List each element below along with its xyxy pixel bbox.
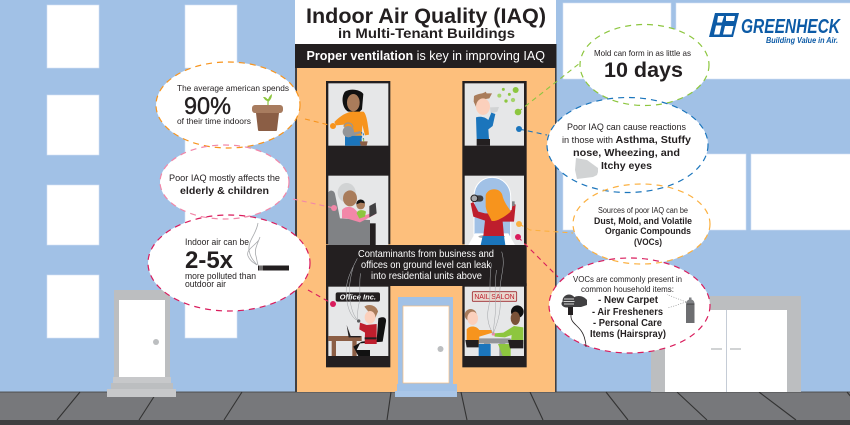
callout: mold in 10 days: [580, 24, 709, 106]
sign: Office Inc.: Office Inc.: [340, 294, 376, 301]
illustration: nail salon customers: [465, 305, 524, 356]
illustration: grandmother and child reading: [328, 183, 377, 245]
icon: cigarette with smoke: [248, 223, 289, 270]
callout: 2-5x more polluted: 2-5x: [185, 247, 234, 274]
illustration: woman with hair dryer: [468, 177, 516, 245]
icon: tissue: [575, 158, 598, 179]
icon: spray can: [667, 294, 694, 323]
upper windows: [326, 81, 527, 246]
callout: VOC household items: - New Carpet: [598, 295, 659, 306]
sidewalk: [0, 392, 850, 425]
text: contaminants note: [358, 249, 494, 282]
left building windows: [47, 5, 237, 338]
callout: 2-5x more polluted: Indoor air can be: [185, 237, 249, 247]
callout: sources: [573, 184, 710, 264]
sign: nail salon: NAIL SALON: [474, 292, 515, 301]
icon: hair dryer: [561, 294, 587, 347]
title: in Multi-Tenant Buildings: [338, 25, 515, 41]
illustration: man sneezing near mold: [474, 87, 519, 146]
callout: 2-5x more polluted: more polluted than: [185, 271, 256, 281]
sign: Office Inc.: [336, 292, 380, 302]
callout: elderly and children: [160, 145, 289, 219]
central door: [395, 297, 457, 397]
right building windows: [563, 3, 850, 230]
callout: reactions: Poor IAQ can cause reactions: [567, 122, 686, 132]
right building door: [651, 296, 801, 392]
text: contaminants note: offices on ground level can leak: [361, 260, 492, 271]
lower band and ground floor windows: [326, 245, 527, 367]
callout: 90% indoors: The average american spends: [177, 83, 289, 93]
callout: VOC household items: - Air Fresheners: [592, 307, 663, 318]
left building door: [107, 290, 176, 397]
callout: elderly and children: elderly & children: [180, 185, 269, 197]
callout: elderly and children: Poor IAQ mostly affects the: [169, 173, 280, 183]
callout: reactions: in those with Asthma, Stuffy: [562, 134, 691, 146]
central orange building: [295, 0, 557, 392]
text: contaminants note: into residential units above: [371, 271, 482, 282]
callout: reactions: [547, 98, 708, 192]
ventilation banner: Proper ventilation is key in improving IAQ: [306, 48, 545, 63]
callout: sources: Organic Compounds: [605, 226, 691, 237]
title: Indoor Air Quality (IAQ): [306, 5, 546, 28]
text: contaminants note: Contaminants from business and: [358, 249, 494, 260]
logo: Greenheck: [709, 13, 841, 45]
title: [306, 5, 546, 41]
ventilation banner: [295, 44, 556, 68]
callout: 2-5x more polluted: outdoor air: [185, 279, 226, 289]
illustration: office worker: [328, 305, 386, 356]
callout: VOC household items: Items (Hairspray): [590, 329, 666, 340]
connector lines and dots: [293, 63, 580, 304]
callout: reactions: nose, Wheezing, and: [573, 147, 680, 159]
logo: Greenheck: Building Value in Air.: [766, 36, 838, 45]
icon: potted plant: [252, 94, 283, 131]
callout: mold in 10 days: Mold can form in as little as: [594, 48, 691, 58]
callout: VOC household items: common household items:: [581, 284, 674, 294]
illustration: woman watering plant: [334, 90, 369, 146]
callout: 90% indoors: [156, 62, 300, 148]
smoke rising from ground floor: [346, 252, 503, 334]
callout: reactions: Itchy eyes: [601, 160, 652, 172]
callout: 2-5x more polluted: [148, 215, 310, 311]
callout backgrounds: [148, 24, 710, 353]
callout: sources: Sources of poor IAQ can be: [598, 206, 688, 215]
callout: 90% indoors: of their time indoors: [177, 117, 251, 126]
callout: VOC household items: VOCs are commonly present in: [573, 274, 682, 284]
connector dots: [330, 109, 522, 307]
callout: sources: (VOCs): [634, 237, 662, 248]
callout: 90% indoors: 90%: [184, 93, 231, 120]
callout: VOC household items: - Personal Care: [593, 318, 662, 329]
callout: sources: Dust, Mold, and Volatile: [594, 216, 692, 227]
callout: mold in 10 days: 10 days: [604, 58, 683, 82]
callout: VOC household items: [549, 258, 710, 353]
